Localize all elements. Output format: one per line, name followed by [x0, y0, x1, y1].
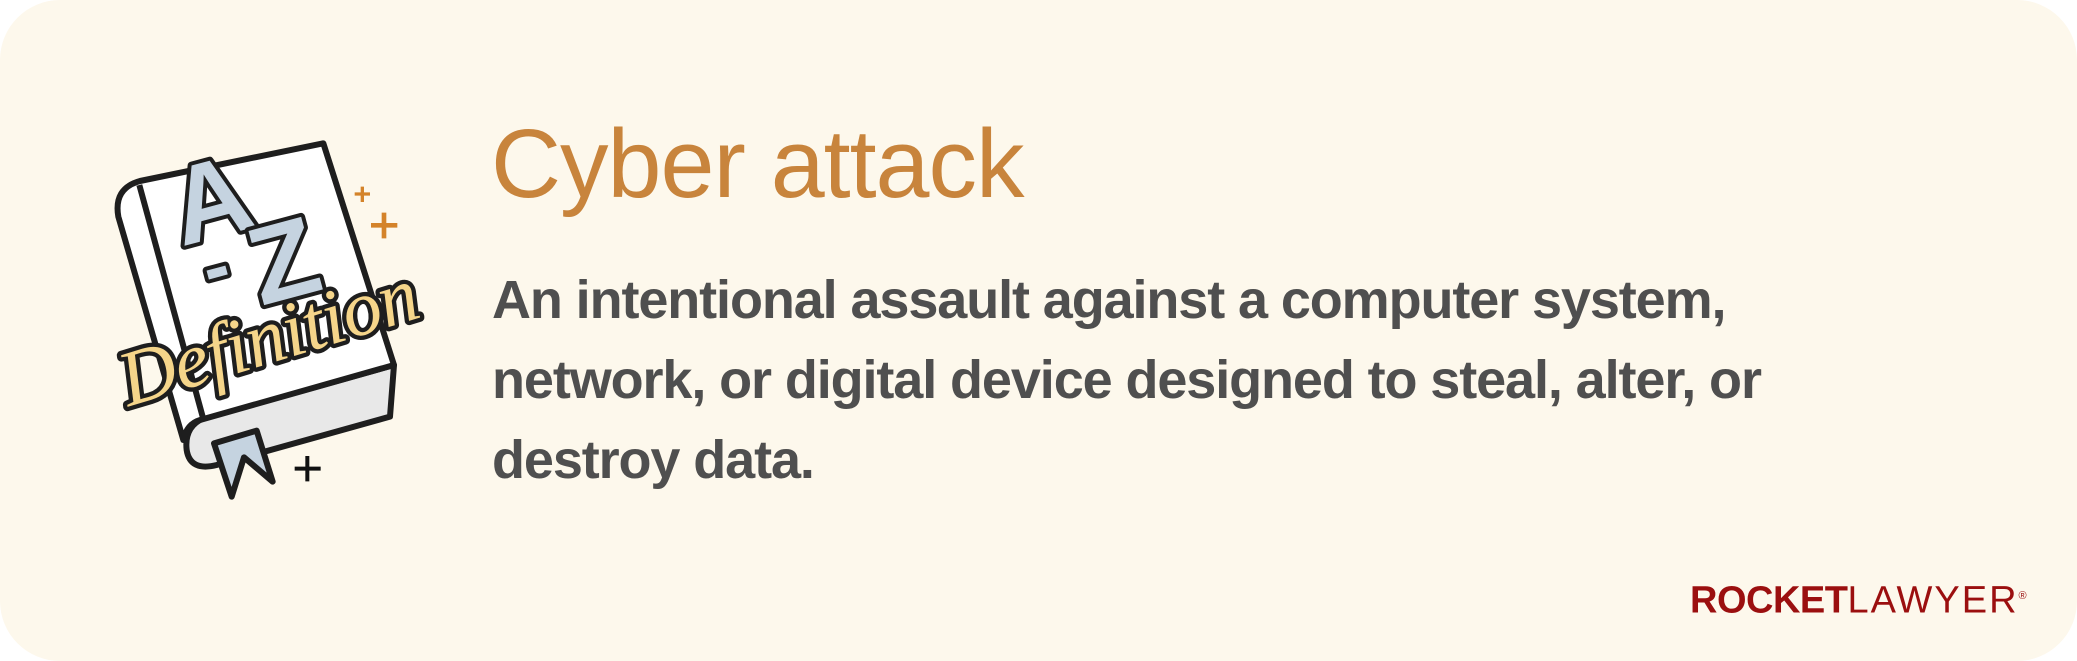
definition text: [492, 270, 1762, 490]
logo: ROCKETLAWYER®: [1690, 580, 2027, 622]
script word Definition: Definition: [107, 250, 428, 423]
bookmark: [214, 431, 273, 497]
sparkles: [355, 187, 370, 202]
book pages: [186, 365, 394, 467]
letters A-Z: Z: [235, 193, 332, 329]
definition text: network, or digital device designed to steal, alter, or: [492, 350, 1761, 410]
book cover: [118, 143, 394, 440]
letters A-Z: [156, 130, 332, 329]
definition text: destroy data.: [492, 430, 814, 490]
definition text: An intentional assault against a computer system,: [492, 270, 1725, 330]
letters A-Z: -: [192, 223, 239, 311]
icon: definition book: [107, 130, 428, 500]
title: Cyber attack: [491, 109, 1024, 218]
letters A-Z: A: [156, 130, 265, 270]
